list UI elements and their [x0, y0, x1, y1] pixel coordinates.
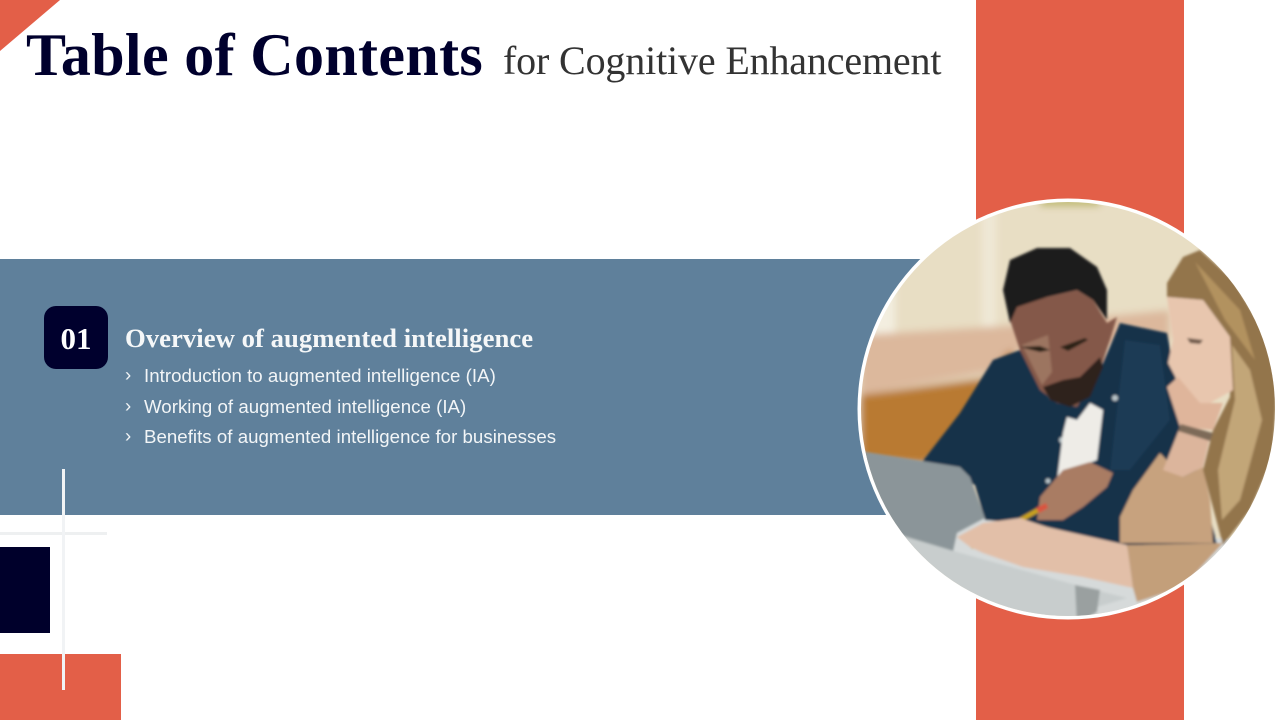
woman's hair [1167, 250, 1277, 545]
accent lines [0, 469, 107, 690]
top-left corner triangle [0, 0, 60, 51]
brow shadows [1020, 346, 1050, 352]
eye [1187, 338, 1203, 344]
bullet: introduction: › [125, 364, 131, 385]
bullet: benefits: › [125, 425, 131, 446]
front laptop [904, 535, 1123, 616]
bullet: benefits: Benefits of augmented intelligence for businesses [144, 426, 556, 447]
background room [850, 190, 1280, 630]
woman's jacket [1120, 453, 1213, 543]
bullet: introduction: Introduction to augmented intelligence (IA) [144, 365, 496, 386]
t-shirt [1057, 403, 1103, 480]
navy accent block [0, 547, 50, 633]
lower desk base [953, 517, 1229, 614]
photo: two colleagues at a laptop [858, 198, 1275, 620]
man's face [1010, 290, 1117, 407]
heading: title: for Cognitive Enhancement [503, 38, 941, 83]
heading: title [26, 22, 942, 88]
section heading: Overview of augmented intelligence [125, 323, 533, 353]
section number badge [44, 306, 108, 369]
bullet list [125, 364, 556, 447]
vertical red band [976, 0, 1184, 720]
man's hair [1003, 248, 1107, 323]
tablet [860, 451, 985, 552]
woman's sleeve [1127, 543, 1223, 602]
woman's face [1167, 297, 1233, 407]
section number badge: 01 [60, 321, 92, 356]
bullet: working: › [125, 395, 131, 416]
bullet: working: Working of augmented intelligence (IA) [144, 396, 466, 417]
woman's forearm [1163, 427, 1210, 477]
man's shirt [922, 323, 1218, 548]
heading: title: Table of Contents [26, 22, 483, 88]
bracelet [1178, 424, 1213, 441]
man's hand [1037, 462, 1113, 520]
pencil [970, 506, 1040, 550]
red accent block [0, 654, 121, 720]
woman's hand and arm [957, 518, 1133, 588]
beard [1043, 357, 1103, 407]
panel: section band [0, 259, 930, 515]
shirt buttons [1046, 395, 1118, 484]
woman's hand on cheek [1167, 377, 1223, 430]
